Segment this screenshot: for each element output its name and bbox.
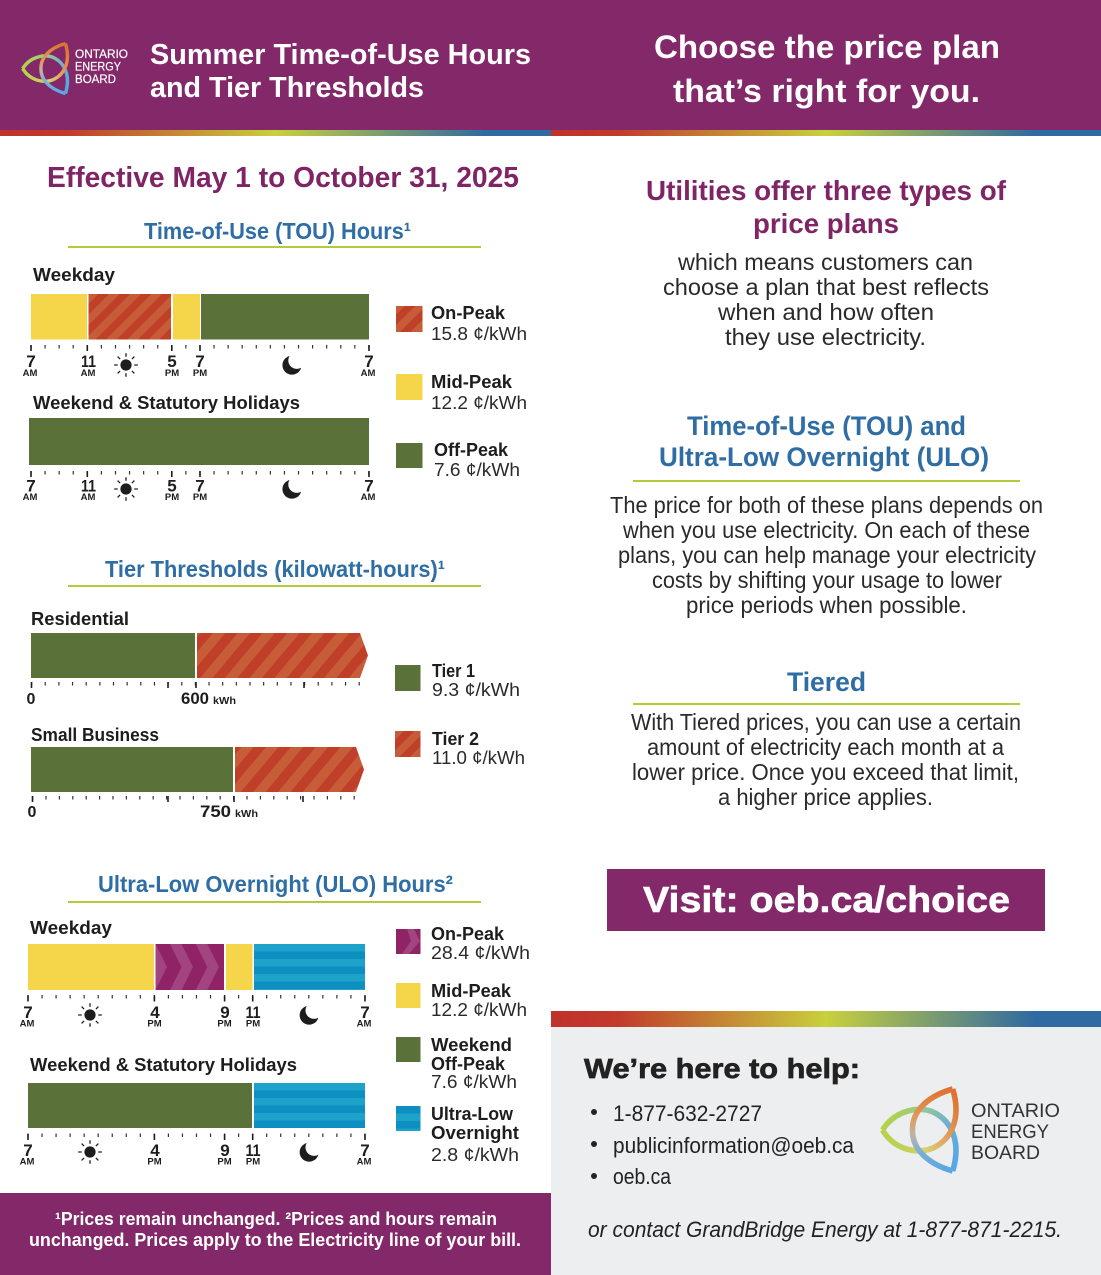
logo: Ontario Energy Board (small): ENERGY bbox=[75, 60, 121, 74]
contact list: publicinformation@oeb.ca bbox=[613, 1133, 855, 1158]
legend: ULO prices: Overnight bbox=[431, 1122, 519, 1143]
chart: ULO weekday: 11 bbox=[246, 1003, 260, 1022]
chart: TOU weekday bbox=[23, 264, 375, 379]
icon: sun bbox=[78, 1140, 102, 1164]
text block: price plans intro: they use electricity. bbox=[725, 324, 926, 350]
text block: TOU and ULO: The price for both of these plans depends on bbox=[610, 492, 1043, 518]
text block: tiered: amount of electricity each month at a bbox=[647, 734, 1004, 760]
legend: TOU prices: 12.2 ¢/kWh bbox=[431, 392, 527, 413]
legend: TOU prices bbox=[396, 302, 527, 480]
call to action: visit website: Visit: oeb.ca/choice bbox=[643, 879, 1010, 920]
text block: price plans intro: choose a plan that best reflects bbox=[663, 274, 989, 300]
legend: ULO prices: Ultra-Low bbox=[431, 1103, 514, 1124]
heading: TOU and ULO bbox=[633, 411, 1020, 482]
chart: ULO weekday: PM bbox=[246, 1018, 260, 1030]
chart: residential tiers: 0 bbox=[27, 691, 36, 708]
logo: Ontario Energy Board (small): ONTARIO bbox=[75, 47, 128, 61]
header band: left bbox=[0, 0, 551, 136]
heading: TOU and ULO: Ultra-Low Overnight (ULO) bbox=[659, 442, 989, 472]
icon: sun bbox=[78, 1003, 102, 1027]
legend: ULO prices: Weekend bbox=[431, 1034, 512, 1055]
chart: ULO weekend and holidays: 9 bbox=[220, 1141, 230, 1160]
chart: ULO weekday: 4 bbox=[150, 1003, 160, 1022]
header title: Summer Time-of-Use Hours bbox=[150, 39, 531, 71]
chart: TOU weekday: AM bbox=[23, 368, 37, 379]
legend: TOU prices: 7.6 ¢/kWh bbox=[434, 459, 520, 480]
chart: TOU weekend and holidays: 7 bbox=[195, 476, 205, 496]
chart: TOU weekend and holidays: PM bbox=[193, 492, 207, 503]
text block: TOU and ULO: plans, you can help manage your electricity bbox=[618, 542, 1036, 568]
heading: three types of price plans: price plans bbox=[753, 208, 899, 239]
logo: Ontario Energy Board (large): ENERGY bbox=[971, 1121, 1049, 1143]
contact list: 1-877-632-2727 bbox=[613, 1101, 762, 1126]
text block: price plans intro: which means customers can bbox=[677, 249, 973, 275]
legend: tier prices: 11.0 ¢/kWh bbox=[432, 747, 525, 768]
contact list: oeb.ca bbox=[613, 1164, 672, 1189]
icon: sun bbox=[114, 477, 138, 501]
legend: tier prices: Tier 1 bbox=[432, 660, 475, 681]
chart: ULO weekend and holidays: PM bbox=[147, 1156, 162, 1168]
chart: TOU weekday: PM bbox=[165, 368, 179, 379]
chart: ULO weekday: AM bbox=[357, 1018, 371, 1030]
text block: tiered: lower price. Once you exceed that limit, bbox=[632, 759, 1019, 785]
heading: TOU and ULO: Time-of-Use (TOU) and bbox=[687, 411, 966, 441]
chart: ULO weekend and holidays: PM bbox=[246, 1156, 260, 1168]
chart: ULO weekday bbox=[20, 917, 371, 1030]
section heading: TOU hours: Time-of-Use (TOU) Hours¹ bbox=[144, 218, 411, 244]
heading: tiered: Tiered bbox=[787, 667, 866, 697]
chart: ULO weekend and holidays: 11 bbox=[246, 1141, 260, 1160]
chart: small business tiers: kWh bbox=[235, 809, 258, 820]
legend: ULO prices: 2.8 ¢/kWh bbox=[431, 1144, 519, 1165]
icon: moon bbox=[300, 1143, 318, 1162]
chart: TOU weekend and holidays: AM bbox=[361, 492, 375, 503]
header band: right: that’s right for you. bbox=[673, 73, 980, 109]
header title bbox=[150, 39, 531, 104]
chart: TOU weekday: 7 bbox=[195, 352, 205, 371]
text block: price plans intro bbox=[663, 249, 989, 350]
chart: ULO weekend and holidays: PM bbox=[217, 1156, 232, 1168]
chart: ULO weekday: PM bbox=[217, 1018, 232, 1030]
chart: ULO weekend and holidays: Weekend & Statutory Holidays bbox=[30, 1054, 297, 1075]
heading: three types of price plans bbox=[646, 175, 1007, 239]
legend: TOU prices: 15.8 ¢/kWh bbox=[431, 323, 527, 344]
panel: contact bbox=[551, 1011, 1101, 1275]
chart: ULO weekend and holidays bbox=[20, 1054, 371, 1168]
chart: ULO weekend and holidays: AM bbox=[357, 1156, 371, 1168]
chart: TOU weekday: AM bbox=[361, 368, 375, 379]
legend: ULO prices: On-Peak bbox=[431, 923, 505, 944]
icon: moon bbox=[282, 480, 301, 499]
chart: TOU weekday: 5 bbox=[167, 352, 177, 371]
text block: TOU and ULO: costs by shifting your usage to lower bbox=[652, 567, 1002, 593]
legend: tier prices bbox=[395, 660, 525, 768]
chart: ULO weekday: AM bbox=[20, 1018, 34, 1030]
chart: TOU weekend and holidays: 5 bbox=[167, 476, 177, 496]
chart: TOU weekday: PM bbox=[193, 368, 207, 379]
chart: ULO weekday: PM bbox=[147, 1018, 162, 1030]
legend: TOU prices: Off-Peak bbox=[434, 439, 509, 460]
text block: tiered: a higher price applies. bbox=[718, 784, 933, 810]
header title: and Tier Thresholds bbox=[150, 72, 424, 104]
footer note: unchanged. Prices apply to the Electricity line of your bill. bbox=[29, 1230, 521, 1250]
chart: residential tiers: 600 bbox=[181, 690, 209, 708]
contact list bbox=[591, 1101, 855, 1189]
chart: TOU weekend and holidays: 7 bbox=[364, 476, 374, 496]
section heading: tier thresholds: Tier Thresholds (kilowatt-hours)¹ bbox=[105, 556, 445, 582]
legend: TOU prices: Mid-Peak bbox=[431, 371, 513, 392]
chart: ULO weekend and holidays: 4 bbox=[150, 1141, 160, 1160]
legend: tier prices: Tier 2 bbox=[432, 728, 479, 749]
chart: small business tiers: 750 bbox=[200, 803, 231, 821]
legend: ULO prices: Mid-Peak bbox=[431, 980, 512, 1001]
legend: ULO prices: 28.4 ¢/kWh bbox=[431, 942, 530, 963]
chart: small business tiers: 0 bbox=[28, 804, 37, 821]
chart: TOU weekend and holidays: Weekend & Statutory Holidays bbox=[33, 392, 300, 413]
icon: moon bbox=[300, 1006, 318, 1025]
text block: tiered bbox=[631, 709, 1021, 810]
text block: price plans intro: when and how often bbox=[717, 299, 934, 325]
header band: right: Choose the price plan bbox=[654, 29, 1000, 65]
contact heading: We’re here to help: bbox=[584, 1053, 860, 1084]
chart: TOU weekday: Weekday bbox=[33, 264, 116, 285]
chart: ULO weekend and holidays: AM bbox=[20, 1156, 34, 1168]
text block: TOU and ULO: when you use electricity. On each of these bbox=[622, 517, 1030, 543]
chart: ULO weekday: 7 bbox=[360, 1003, 370, 1022]
heading: three types of price plans: Utilities offer three types of bbox=[646, 175, 1007, 206]
footer note bbox=[0, 1193, 551, 1275]
chart: ULO weekday: Weekday bbox=[30, 917, 113, 938]
chart: TOU weekend and holidays: PM bbox=[165, 492, 179, 503]
chart: residential tiers: Residential bbox=[31, 608, 129, 629]
legend: tier prices: 9.3 ¢/kWh bbox=[432, 679, 520, 700]
text block: TOU and ULO bbox=[610, 492, 1043, 618]
chart: residential tiers: kWh bbox=[213, 696, 236, 707]
legend: ULO prices: Off-Peak bbox=[431, 1053, 506, 1074]
call to action: visit website bbox=[607, 869, 1045, 931]
utility contact line: or contact GrandBridge Energy at 1-877-871-2215. bbox=[588, 1217, 1062, 1242]
chart: small business tiers bbox=[28, 724, 364, 821]
logo: Ontario Energy Board (small) bbox=[23, 44, 128, 94]
icon: sun bbox=[114, 353, 138, 377]
footer note: ¹Prices remain unchanged. ²Prices and hours remain bbox=[55, 1209, 497, 1229]
text block: TOU and ULO: price periods when possible. bbox=[686, 592, 967, 618]
legend: ULO prices: 7.6 ¢/kWh bbox=[431, 1071, 517, 1092]
logo: Ontario Energy Board (large): BOARD bbox=[971, 1142, 1040, 1164]
legend: ULO prices: 12.2 ¢/kWh bbox=[431, 999, 527, 1020]
chart: ULO weekend and holidays: 7 bbox=[23, 1141, 33, 1160]
logo: Ontario Energy Board (small): BOARD bbox=[75, 72, 116, 86]
chart: TOU weekday: 7 bbox=[364, 352, 374, 371]
icon: moon bbox=[282, 356, 301, 375]
chart: TOU weekend and holidays: 7 bbox=[26, 476, 36, 496]
chart: ULO weekday: 9 bbox=[220, 1003, 230, 1022]
legend: ULO prices bbox=[396, 923, 530, 1165]
chart: TOU weekend and holidays: AM bbox=[23, 492, 37, 503]
logo: Ontario Energy Board (large) bbox=[882, 1089, 1060, 1171]
header band: right bbox=[551, 0, 1101, 136]
chart: residential tiers bbox=[27, 608, 368, 708]
chart: TOU weekday: AM bbox=[81, 368, 95, 379]
logo: Ontario Energy Board (large): ONTARIO bbox=[971, 1100, 1060, 1122]
chart: ULO weekend and holidays: 7 bbox=[360, 1141, 370, 1160]
text block: tiered: With Tiered prices, you can use a certain bbox=[631, 709, 1021, 735]
chart: small business tiers: Small Business bbox=[31, 724, 159, 745]
chart: TOU weekend and holidays: AM bbox=[81, 492, 95, 503]
chart: TOU weekday: 7 bbox=[26, 352, 36, 371]
chart: TOU weekend and holidays bbox=[23, 392, 375, 503]
legend: TOU prices: On-Peak bbox=[431, 302, 506, 323]
chart: TOU weekday: 11 bbox=[81, 352, 96, 371]
chart: ULO weekday: 7 bbox=[23, 1003, 33, 1022]
effective date heading: Effective May 1 to October 31, 2025 bbox=[47, 162, 519, 194]
chart: TOU weekend and holidays: 11 bbox=[81, 476, 96, 496]
section heading: ULO hours: Ultra-Low Overnight (ULO) Hours² bbox=[98, 871, 453, 897]
